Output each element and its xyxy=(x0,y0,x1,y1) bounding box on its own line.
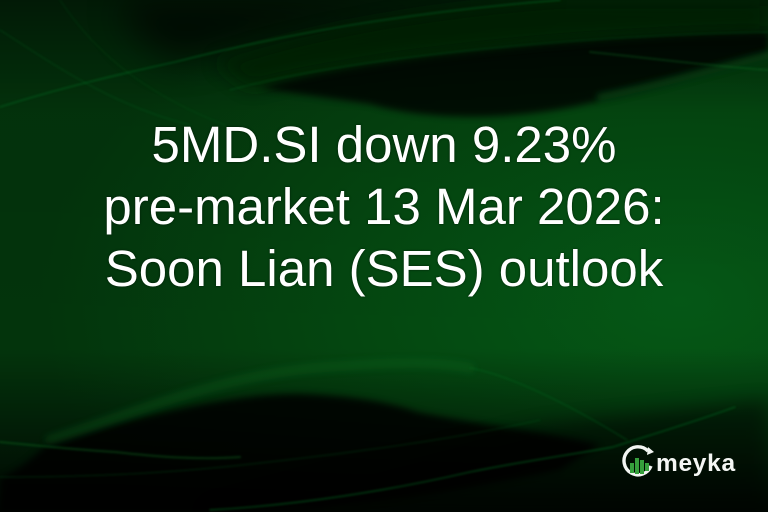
logo: meyka xyxy=(622,445,736,477)
title xyxy=(103,116,665,298)
icon: ring with bars xyxy=(624,447,654,475)
title: pre-market 13 Mar 2026: xyxy=(103,178,665,235)
title: Soon Lian (SES) outlook xyxy=(105,240,663,297)
title: 5MD.SI down 9.23% xyxy=(152,116,616,173)
wordmark: meyka xyxy=(656,450,736,477)
bottom dark hump xyxy=(0,394,600,512)
top dark lens xyxy=(260,32,768,117)
top dark sweep xyxy=(120,0,560,62)
